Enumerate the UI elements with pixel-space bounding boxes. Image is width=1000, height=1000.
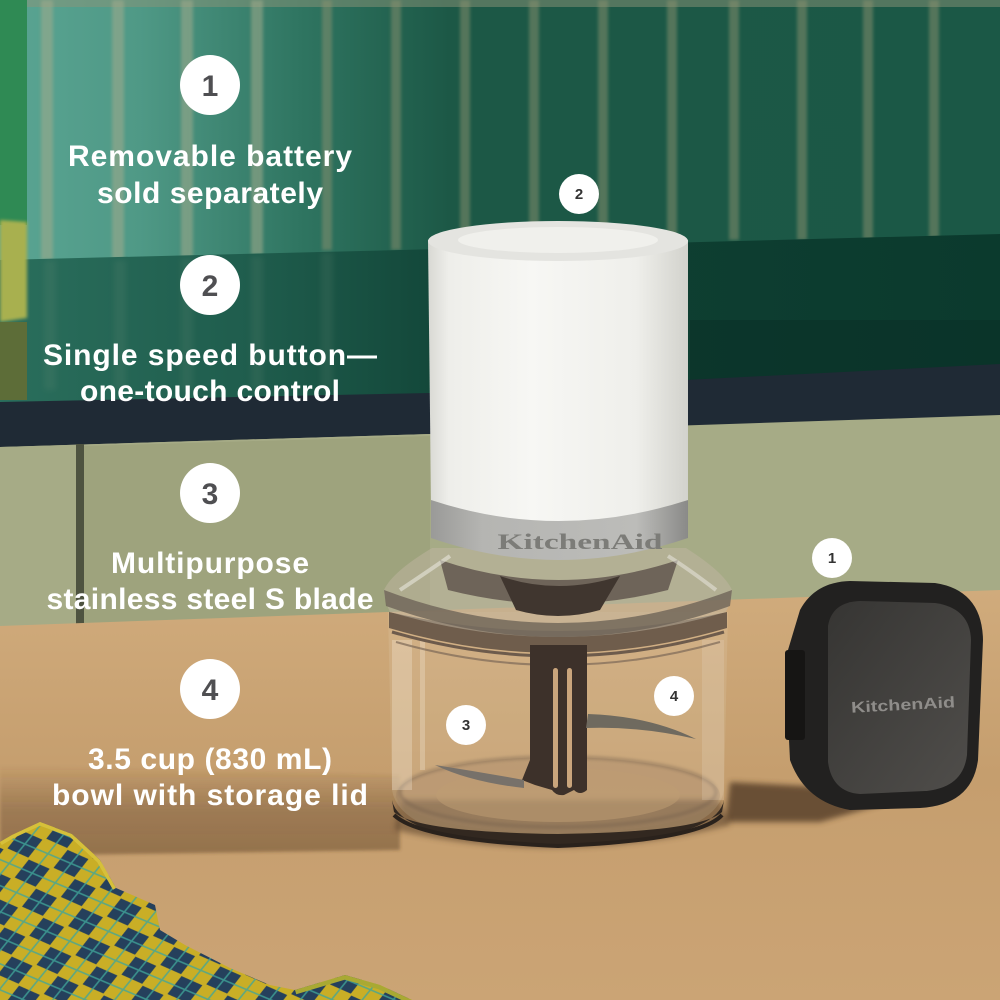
callout 1 label: sold separately xyxy=(97,177,323,210)
product: chopper xyxy=(384,221,732,846)
marker 3 on blade: 3 xyxy=(462,717,470,734)
battery logo: KitchenAid xyxy=(851,694,955,717)
marker 1 on battery xyxy=(812,538,852,578)
callout 2 label: one-touch control xyxy=(80,375,340,408)
background: dark counter xyxy=(0,0,1000,420)
shaft and blade xyxy=(435,645,696,795)
white cylinder xyxy=(428,221,688,521)
callout 3 label: 3 xyxy=(202,478,218,511)
callout 2 label: 2 xyxy=(202,270,218,303)
callout 4 label: 3.5 cup (830 mL) xyxy=(88,743,332,776)
callout 1 label: 1 xyxy=(202,70,218,103)
marker 1 on battery: 1 xyxy=(828,550,836,567)
background: olive cabinets xyxy=(0,415,1000,640)
callout 3 label xyxy=(46,463,374,616)
callout 1 label xyxy=(68,55,352,210)
marker 4 on bowl xyxy=(654,676,694,716)
fabric towel xyxy=(0,810,420,1000)
callout 4 label: 4 xyxy=(202,674,219,707)
callout 4 label: bowl with storage lid xyxy=(52,779,368,812)
background: counter edge xyxy=(0,364,1000,447)
bowl lid xyxy=(384,548,732,637)
silver band: KitchenAid xyxy=(498,529,662,554)
marker 2 on lid: 2 xyxy=(575,186,583,203)
callout 3 label: Multipurpose xyxy=(111,547,309,580)
background: wooden table xyxy=(0,590,1000,1000)
marker 2 on lid xyxy=(559,174,599,214)
background: green tile wall xyxy=(0,0,1000,262)
callout 3 label: stainless steel S blade xyxy=(46,583,374,616)
callout 1 label: Removable battery xyxy=(68,140,352,173)
marker 3 on blade xyxy=(446,705,486,745)
silver band xyxy=(431,500,688,560)
product: battery xyxy=(785,581,983,810)
callout 2 label: Single speed button— xyxy=(43,339,377,372)
callout 2 label xyxy=(43,255,377,408)
marker 4 on bowl: 4 xyxy=(670,688,679,705)
bowl xyxy=(388,612,728,846)
callout 4 label xyxy=(52,659,368,812)
